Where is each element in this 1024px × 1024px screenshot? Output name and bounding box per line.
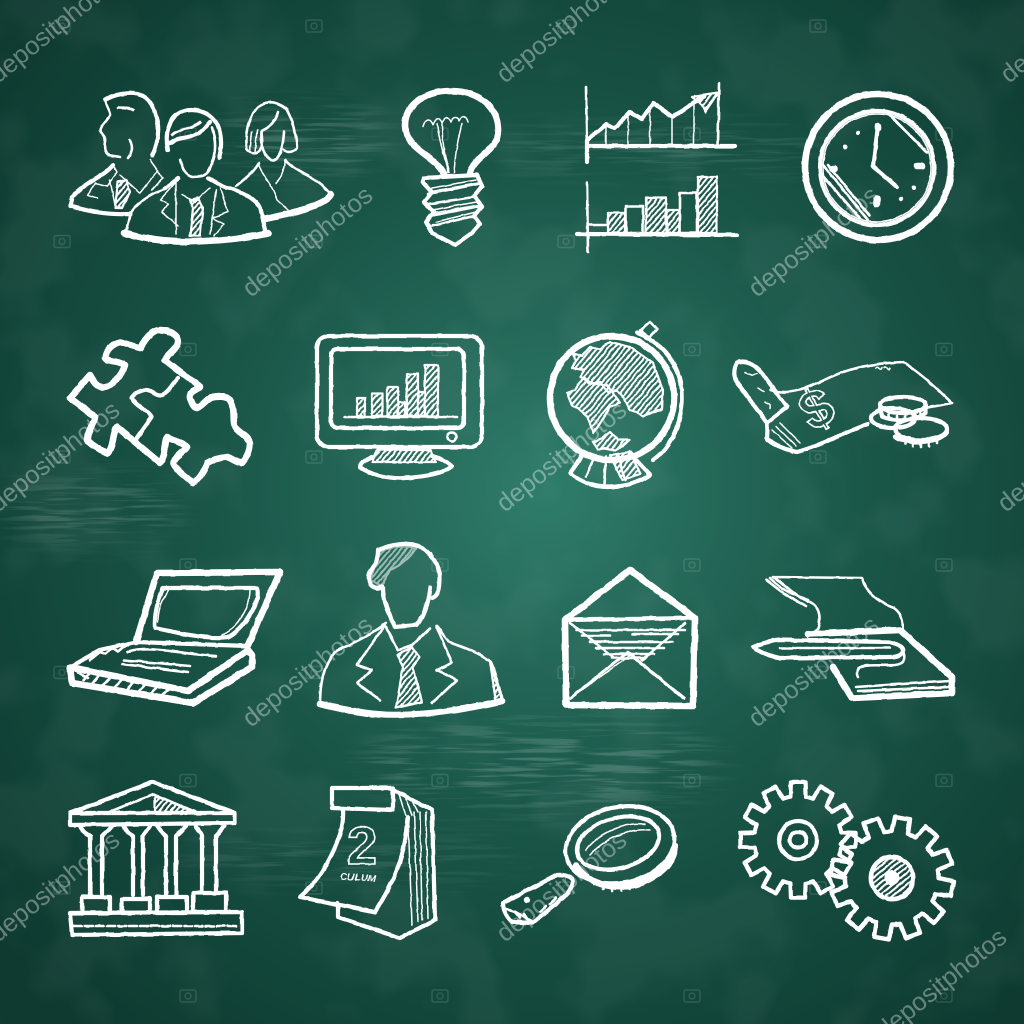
pen — [753, 640, 904, 677]
icon: open envelope — [565, 570, 695, 706]
front man — [124, 110, 268, 242]
globe stand — [570, 452, 650, 487]
icon: business team — [70, 93, 331, 242]
left man — [70, 93, 163, 214]
watermarks: depositphotos — [743, 181, 884, 303]
woman — [236, 102, 331, 219]
icon: light bulb — [405, 91, 498, 245]
watermarks: depositphotos — [237, 611, 378, 733]
dollar sign: $ — [789, 376, 844, 443]
icon: jigsaw puzzle — [70, 330, 250, 483]
calendar date: 2 — [347, 816, 377, 876]
icon: businessman portrait — [320, 544, 502, 715]
icon: magnifying glass — [503, 796, 682, 923]
coins — [871, 397, 947, 447]
small gear — [821, 807, 963, 949]
watermarks: depositphotos — [237, 181, 378, 303]
icon: book and pen — [753, 577, 952, 698]
bulb screw base — [423, 175, 482, 245]
magnifier handle — [503, 875, 573, 923]
line chart — [586, 83, 735, 162]
bar chart — [577, 177, 737, 252]
icon: line and bar charts — [577, 83, 737, 252]
icon: wall clock — [805, 94, 951, 240]
icon: bank building — [70, 782, 242, 935]
icon: laptop — [70, 572, 280, 703]
watermarks: depositphotos — [743, 611, 884, 733]
screen bar chart — [345, 365, 457, 417]
icon: globe — [550, 322, 682, 487]
large gear — [740, 782, 856, 898]
columns — [80, 826, 226, 913]
watermarks: depositphotos — [491, 396, 632, 518]
icon: tear-off calendar: CULUM — [340, 872, 377, 885]
watermarks: depositphotos — [491, 826, 632, 948]
continents — [572, 342, 663, 417]
monitor stand — [372, 450, 436, 462]
icon: gears — [740, 782, 963, 949]
icon set — [70, 83, 963, 949]
icon: tear-off calendar — [300, 788, 435, 938]
icon: banknote and coins — [734, 362, 952, 452]
icon: monitor with chart — [317, 336, 482, 478]
